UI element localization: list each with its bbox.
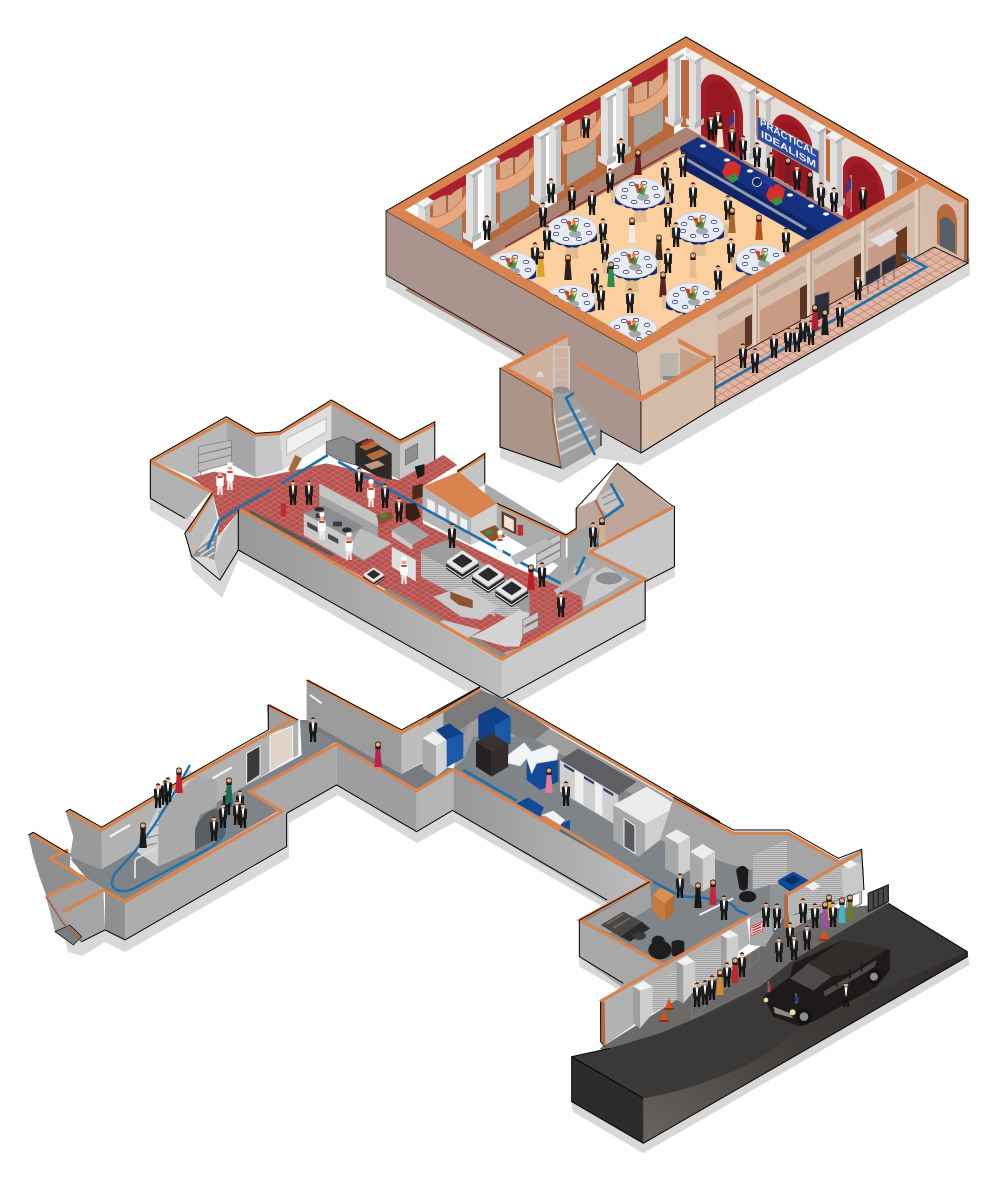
round table bottom: [603, 315, 661, 359]
long back wall: [453, 688, 720, 913]
guests behind bottom table: [597, 285, 634, 313]
blue route curved: [112, 765, 232, 891]
electric panel: [405, 443, 418, 465]
white box tower 2: [690, 844, 715, 892]
annex front wall: [500, 368, 561, 468]
wire shelf rack: [326, 437, 356, 465]
second left wall: [66, 809, 102, 870]
long front wall: [125, 812, 287, 940]
road outline: [572, 903, 967, 1143]
hallway base floor: [68, 830, 160, 887]
head table people: [707, 110, 867, 212]
right annex broken edge: [595, 500, 604, 540]
broken wall edge: [552, 398, 561, 468]
bay guests: [676, 873, 854, 962]
rear black gate: [868, 885, 888, 912]
dark shelf with crates: [356, 438, 392, 480]
balcony bay 4: [624, 49, 674, 165]
lower left wall: [63, 888, 105, 942]
small return wall: [214, 512, 238, 580]
guests behind second row: [539, 182, 763, 240]
kitchen back walls: [150, 400, 485, 492]
hallway and bay people: [139, 717, 854, 1022]
road top surface: [572, 903, 967, 1143]
guests behind top table: [606, 149, 674, 203]
security scanners: [815, 254, 896, 322]
stair guests: [139, 767, 247, 848]
white box tower 1: [665, 829, 690, 877]
ballroom left exterior wall: [386, 211, 641, 453]
orange wall strips: [681, 60, 915, 215]
broken back wall end: [267, 704, 298, 730]
white cloths: [508, 743, 558, 773]
banner: practical idealism: IDEALISM: [761, 129, 816, 171]
ballroom floor rose band: [405, 127, 915, 420]
left stair: [185, 493, 218, 560]
blue cart: [527, 758, 558, 790]
panel: lower hallway stores: [418, 687, 720, 913]
head table: [680, 137, 843, 240]
panel: loading bay and road: [543, 797, 969, 1153]
back wall of loading bay: [660, 798, 864, 927]
balcony bay 1: [423, 163, 473, 279]
rims: [543, 800, 862, 1002]
round table row 2 left: [543, 215, 601, 259]
elevator door: [270, 726, 293, 772]
ceiling lights: [110, 767, 232, 837]
red arch 1: [701, 74, 743, 160]
road shadow: [572, 955, 969, 1153]
sidewalk: [600, 903, 888, 1053]
banner: practical idealism: PRACTICAL: [760, 117, 816, 160]
loading bay floor: [547, 820, 787, 963]
side room wall: [307, 680, 402, 774]
left wall and right wall columns: [414, 47, 901, 275]
corridor wall with doors: [637, 184, 934, 398]
corridor darker recess: [443, 688, 485, 750]
right stair annex walls: [568, 463, 674, 582]
red arch 2: [772, 114, 814, 200]
corridor end wall with arch: [915, 177, 968, 264]
ballroom outline: [386, 37, 968, 468]
hallway wall shadow: [62, 785, 668, 992]
broken floor: [55, 925, 82, 945]
kitchen front right wall: [502, 580, 645, 698]
stair annex interior: [505, 335, 568, 400]
stair flight: [137, 770, 197, 867]
picture and fire extinguishers: [281, 503, 523, 536]
stairs to ballroom: [536, 347, 601, 470]
blue bin stack: [436, 723, 463, 767]
limo agent: [842, 982, 850, 1007]
right stair route: [576, 483, 623, 575]
kitchen outlines: [150, 400, 674, 698]
sign on gate: [751, 922, 763, 936]
panel: ballroom level: [386, 37, 968, 470]
black oven near front: [363, 569, 384, 587]
far left broken wall: [28, 832, 85, 897]
rims: [418, 689, 720, 882]
blue route on corridor: [715, 254, 926, 388]
lower left connecting wall: [46, 878, 103, 932]
outlines: [28, 680, 480, 942]
panel: lower hallway left: [28, 680, 485, 945]
orange topped storage block: [423, 472, 497, 545]
guests behind fourth row: [537, 248, 722, 297]
round table lower right: [662, 283, 720, 327]
hallway floor: [70, 720, 337, 900]
wooden crate: [653, 887, 674, 922]
blue bins near wall: [517, 797, 570, 833]
back wall: [102, 719, 298, 870]
security gate: [753, 838, 788, 923]
barriers: [692, 892, 862, 1018]
kitchen rear corridor wall: [485, 483, 566, 570]
right kitchen base floor: [468, 551, 645, 661]
blue route: [560, 830, 790, 940]
rims: [32, 681, 480, 942]
oven 3: [495, 580, 528, 607]
round table centre: [603, 248, 661, 292]
right counter and sink: [511, 538, 630, 607]
gate opening: [750, 907, 773, 947]
road left face: [572, 1057, 643, 1143]
back right wall: [686, 47, 915, 257]
blue dumpster: [778, 872, 808, 893]
round table row 2 right: [670, 212, 728, 256]
oven 1: [446, 552, 479, 580]
door dark: [247, 746, 260, 784]
ballroom shadow: [386, 258, 970, 483]
balcony bay 2: [490, 125, 540, 241]
right storefront wall: [784, 852, 864, 932]
corridor floor: [300, 720, 453, 790]
black equipment cases: [736, 866, 756, 902]
balcony bay 3: [557, 87, 607, 203]
cooking island counter: [319, 483, 392, 562]
ballroom wall caps: [386, 37, 968, 402]
road front ramp: [643, 952, 967, 1143]
blue route main: [281, 455, 561, 583]
stair block: [158, 775, 217, 867]
red floor border line: [505, 148, 678, 247]
hall guests: [309, 717, 570, 806]
guests in corridor: [739, 275, 862, 373]
big white unit: [613, 787, 678, 862]
round table row 1: [611, 178, 669, 222]
round table far left: [482, 252, 540, 296]
lower wall end cap: [600, 1000, 605, 1045]
chefs: [216, 462, 504, 584]
corridor right wall: [402, 709, 443, 774]
side wall light: [417, 768, 453, 832]
return wall: [250, 743, 337, 813]
pale columns 2: [677, 956, 695, 1003]
pale columns 3: [721, 930, 738, 975]
trash bags: [633, 932, 684, 959]
kitchen rims: [150, 403, 673, 659]
panel: kitchen level: [150, 400, 674, 698]
route segment: [463, 770, 660, 881]
equipment machine row: [560, 748, 637, 827]
kitchen shadow: [150, 496, 675, 712]
chair stacks: [405, 483, 423, 522]
table with green crate: [376, 512, 505, 542]
peach dance floor: [490, 150, 815, 342]
white cabinet: [423, 732, 447, 777]
arched opening: [195, 808, 224, 850]
side room floor: [585, 907, 673, 963]
oven 2: [472, 566, 504, 593]
wooden beams against wall: [288, 455, 302, 473]
left stair route: [207, 489, 271, 549]
round table right: [732, 245, 790, 289]
head table usher: [679, 152, 687, 177]
tall blue bin stack: [478, 707, 511, 752]
red arch 3: [843, 156, 885, 242]
hall floor: [453, 737, 720, 913]
hall long front wall: [453, 768, 650, 903]
guests and staff: [289, 467, 606, 617]
end wall: [105, 890, 125, 940]
oven stack bodies: [421, 540, 530, 623]
steel prep table and crate: [433, 587, 499, 620]
blue route on stairs: [566, 393, 595, 455]
black bin stack: [476, 733, 508, 777]
front wall counter: [249, 510, 333, 557]
stove: [304, 505, 364, 560]
kitchen front long wall: [238, 510, 502, 698]
alcove inner walls: [637, 307, 715, 398]
white metal detector bar: [699, 898, 733, 915]
kitchen left exterior wall: [150, 460, 211, 519]
storage rack left: [199, 440, 231, 480]
dumpster: [601, 912, 650, 942]
traffic cones: [658, 929, 830, 1022]
round table lower left: [541, 285, 599, 329]
side room inner wall: [585, 883, 652, 933]
kitchen people: [216, 462, 606, 617]
lower storefront wall: [600, 917, 750, 1045]
pale columns 1: [633, 981, 653, 1028]
flags: [729, 110, 851, 212]
trash can: [415, 464, 424, 478]
rack right: [523, 533, 561, 635]
store room lower shadow: [579, 957, 663, 992]
front right exterior wall: [641, 356, 715, 453]
railing: [135, 847, 158, 878]
steel sink unit: [392, 522, 430, 582]
side room light: [310, 695, 322, 703]
corridor tile floor: [715, 247, 968, 407]
guests behind third row: [531, 217, 790, 267]
wall window: [287, 418, 326, 455]
store room front wall: [579, 920, 663, 988]
left crowd behind barrier: [693, 952, 746, 1007]
front counters: [381, 588, 530, 658]
dark alcove: [443, 690, 550, 743]
kitchen red tile floor: [192, 455, 583, 653]
limousine: [763, 940, 890, 1027]
outlines: [427, 687, 720, 900]
ushers along wall: [483, 113, 625, 240]
bay outlines: [579, 797, 864, 1047]
side wall segment: [337, 743, 417, 832]
